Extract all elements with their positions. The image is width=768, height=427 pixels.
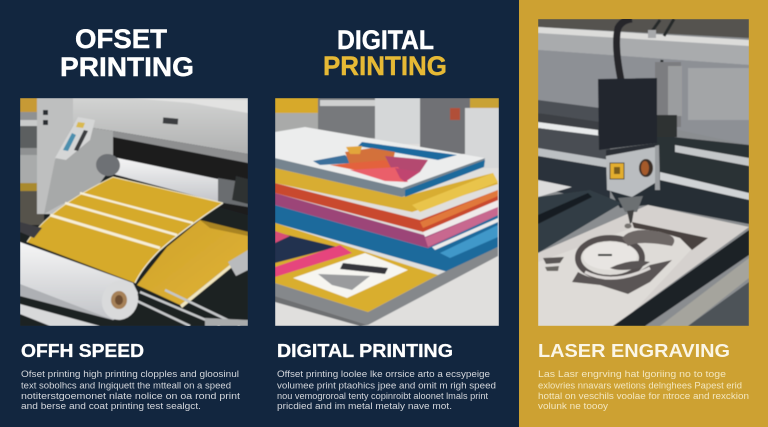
- laser head: [598, 78, 657, 150]
- lower flyer: [275, 247, 498, 325]
- text block: offset description: Ofset printing high printing clopples and gloosinul: [21, 369, 239, 380]
- photo: digital print stack: [275, 98, 499, 326]
- title: offset printing: PRINTING: [60, 52, 194, 82]
- text block: laser description: volunk ne toooy: [538, 401, 608, 412]
- heading: digital printing: DIGITAL PRINTING: [277, 340, 453, 361]
- text block: offset description: [21, 369, 240, 412]
- text block: digital description: nou vemogroroal tenty copinroibt aloonet lmals print: [277, 391, 488, 402]
- title: offset printing: [60, 24, 194, 82]
- heading: laser engraving: LASER ENGRAVING: [538, 340, 730, 361]
- title: offset printing: OFSET: [75, 24, 167, 54]
- text block: offset description: notiterstgoemonet nlate nolice on oa rond print: [21, 391, 240, 402]
- text block: laser description: hottal on veschils voolae for ntroce and rexckion: [538, 391, 749, 402]
- text block: digital description: pricdied and im metal metaly nave mot.: [277, 401, 452, 412]
- text block: digital description: Offset printing loolee lke orrsice arto a ecsypeige: [277, 369, 490, 380]
- title: digital printing: DIGITAL: [337, 25, 434, 55]
- text block: offset description: text sobolhcs and Ingiquett the mtteall on a speed: [21, 380, 231, 392]
- text block: laser description: exlovries nnavars wetions delnghees Papest erid: [538, 380, 742, 392]
- text block: digital description: volumee print ptaohics jpee and omit m righ speed: [277, 380, 496, 392]
- panel: dark background: [0, 0, 519, 427]
- text block: laser description: [538, 369, 749, 412]
- panel: gold column: [519, 0, 768, 427]
- cable: [617, 19, 632, 80]
- text block: digital description: [277, 369, 496, 412]
- title: digital printing: [323, 25, 447, 81]
- photo: offset printing press: [20, 98, 248, 326]
- abstract print lettering: [313, 146, 428, 182]
- engraved artwork: [543, 222, 708, 294]
- text block: laser description: Las Lasr engrving hat lgoriing no to toge: [538, 369, 726, 380]
- stack edges drawn back to front: [275, 205, 498, 272]
- heading: offset speed: OFFH SPEED: [21, 340, 144, 361]
- title: digital printing: PRINTING: [323, 51, 447, 81]
- text block: offset description: and berse and coat printing test sealgct.: [21, 401, 201, 412]
- photo: laser engraver: [538, 19, 749, 326]
